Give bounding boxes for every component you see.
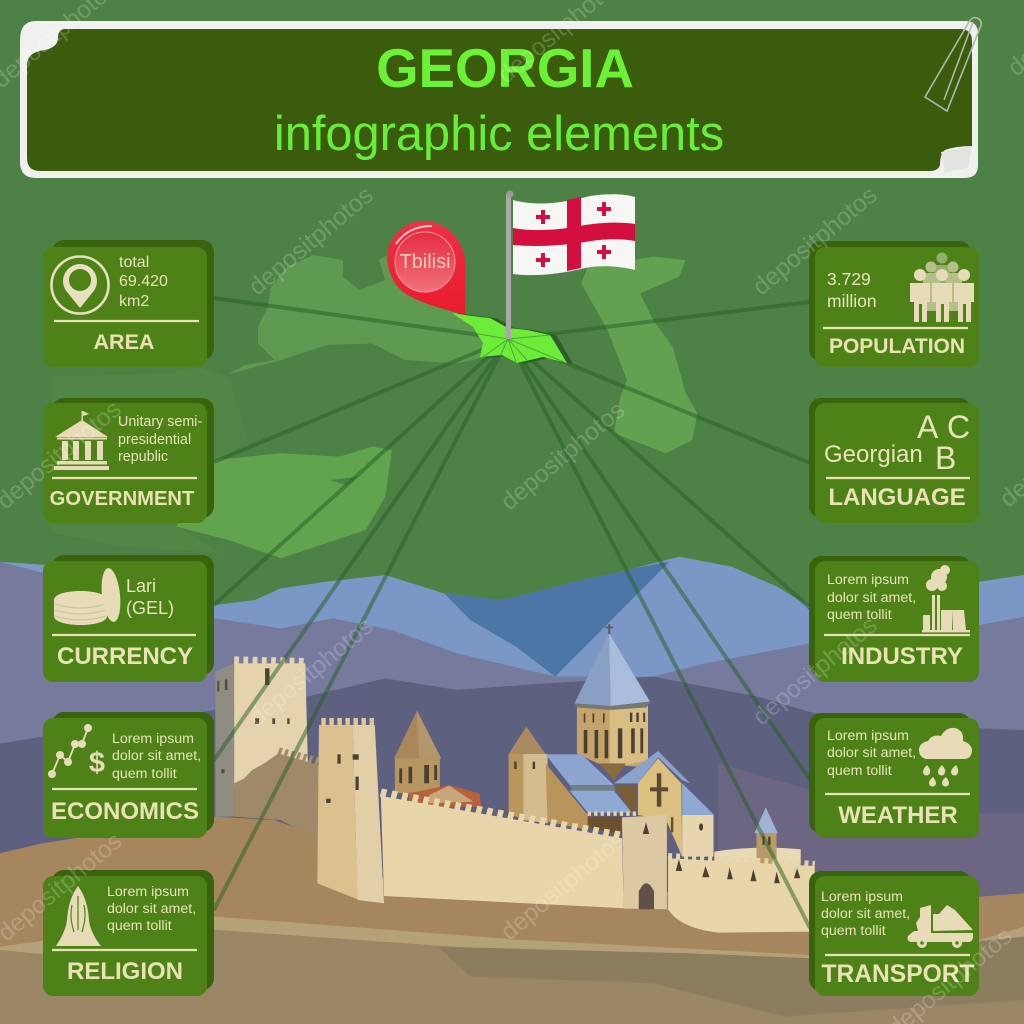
pin: Tbilisi: [387, 221, 465, 315]
icon: letters: B: [935, 440, 956, 476]
icon: rain cloud: [919, 728, 972, 786]
icon: people: [910, 252, 974, 322]
icon: praying hands: [56, 886, 101, 946]
text: area value: total: [119, 254, 149, 271]
small roofed tower: [394, 711, 481, 807]
text: area value: 69.420: [119, 273, 168, 290]
text: religion: dolor sit amet,: [107, 901, 196, 917]
icon: chart and dollar: $: [89, 747, 105, 779]
Georgia country shape: [452, 313, 573, 364]
watermark: depositphotos: [244, 613, 379, 732]
heading: weather: WEATHER: [838, 802, 958, 829]
text: area value: km2: [119, 293, 149, 310]
icon: factory: [922, 565, 970, 632]
header banner: [20, 18, 981, 178]
text: economics: quem tollit: [112, 766, 177, 782]
text: economics: dolor sit amet,: [112, 748, 201, 764]
panel: transport: [809, 871, 979, 996]
watermark: depositphotos: [748, 612, 883, 731]
text: transport: quem tollit: [821, 923, 886, 939]
text: religion: quem tollit: [107, 918, 172, 934]
heading: industry: INDUSTRY: [841, 643, 963, 670]
icon: chart and dollar: [48, 724, 105, 779]
mountains and ground: [0, 557, 1024, 1024]
panel: weather: [809, 713, 979, 838]
panel: economics: [43, 712, 214, 838]
text: industry: dolor sit amet,: [827, 590, 916, 606]
text: currency name: (GEL): [126, 598, 174, 618]
panel: government: [43, 398, 214, 523]
right wall and turret: [668, 807, 815, 933]
text: population value: million: [827, 291, 877, 311]
heading: currency: CURRENCY: [57, 643, 193, 670]
icon: dump truck: [908, 905, 973, 948]
heading: transport: TRANSPORT: [821, 961, 975, 988]
church: [509, 624, 714, 857]
text: economics: Lorem ipsum: [112, 731, 194, 747]
rock mound: [234, 753, 319, 840]
pin: Tbilisi: Tbilisi: [399, 251, 451, 273]
text: weather: Lorem ipsum: [827, 728, 909, 744]
panel: population: [809, 241, 979, 367]
icon: location pin: [52, 256, 108, 314]
icon: parliament building: [54, 411, 109, 470]
text: language name: Georgian: [824, 441, 923, 468]
far left tower: [215, 660, 308, 817]
text: weather: quem tollit: [827, 763, 892, 779]
title: GEORGIA: [376, 38, 634, 99]
panel: religion: [43, 870, 214, 996]
watermark: depositphotos: [244, 182, 379, 301]
heading: population: POPULATION: [829, 335, 965, 358]
text: government type: Unitary semi-: [118, 414, 202, 430]
watermark: depositphotos: [496, 827, 631, 946]
text: industry: Lorem ipsum: [827, 572, 909, 588]
panel: area: [43, 240, 214, 367]
main curtain wall: [381, 793, 624, 908]
icon: coins: [54, 567, 123, 625]
text: industry: quem tollit: [827, 607, 892, 623]
gate tower: [622, 815, 667, 909]
heading: religion: RELIGION: [67, 958, 183, 985]
icon: paper clip: [925, 18, 981, 111]
subtitle: infographic elements: [274, 107, 724, 161]
text: transport: dolor sit amet,: [821, 906, 910, 922]
text: currency name: Lari: [126, 576, 156, 596]
text: government type: presidential: [118, 432, 191, 448]
castle: [215, 624, 815, 933]
text: population value: 3.729: [827, 269, 871, 289]
panel: industry: [809, 556, 979, 682]
connector lines: [214, 298, 810, 928]
icon: letters: [917, 409, 970, 476]
heading: economics: ECONOMICS: [51, 798, 199, 825]
watermark: depositphotos: [748, 182, 883, 301]
main square tower: [317, 722, 384, 903]
heading: area: AREA: [94, 330, 154, 354]
icon: letters: A: [917, 409, 939, 445]
panel: currency: [43, 555, 214, 682]
icon: letters: C: [947, 409, 970, 445]
panel: language: [809, 398, 979, 523]
heading: language: LANGUAGE: [828, 484, 966, 511]
text: transport: Lorem ipsum: [821, 889, 903, 905]
text: weather: dolor sit amet,: [827, 745, 916, 761]
flag of Georgia: [506, 190, 635, 339]
text: government type: republic: [118, 449, 168, 465]
text: religion: Lorem ipsum: [107, 884, 189, 900]
watermark: depositphotos: [496, 397, 631, 516]
heading: government: GOVERNMENT: [50, 488, 195, 510]
map: neighbouring land: [52, 248, 698, 558]
